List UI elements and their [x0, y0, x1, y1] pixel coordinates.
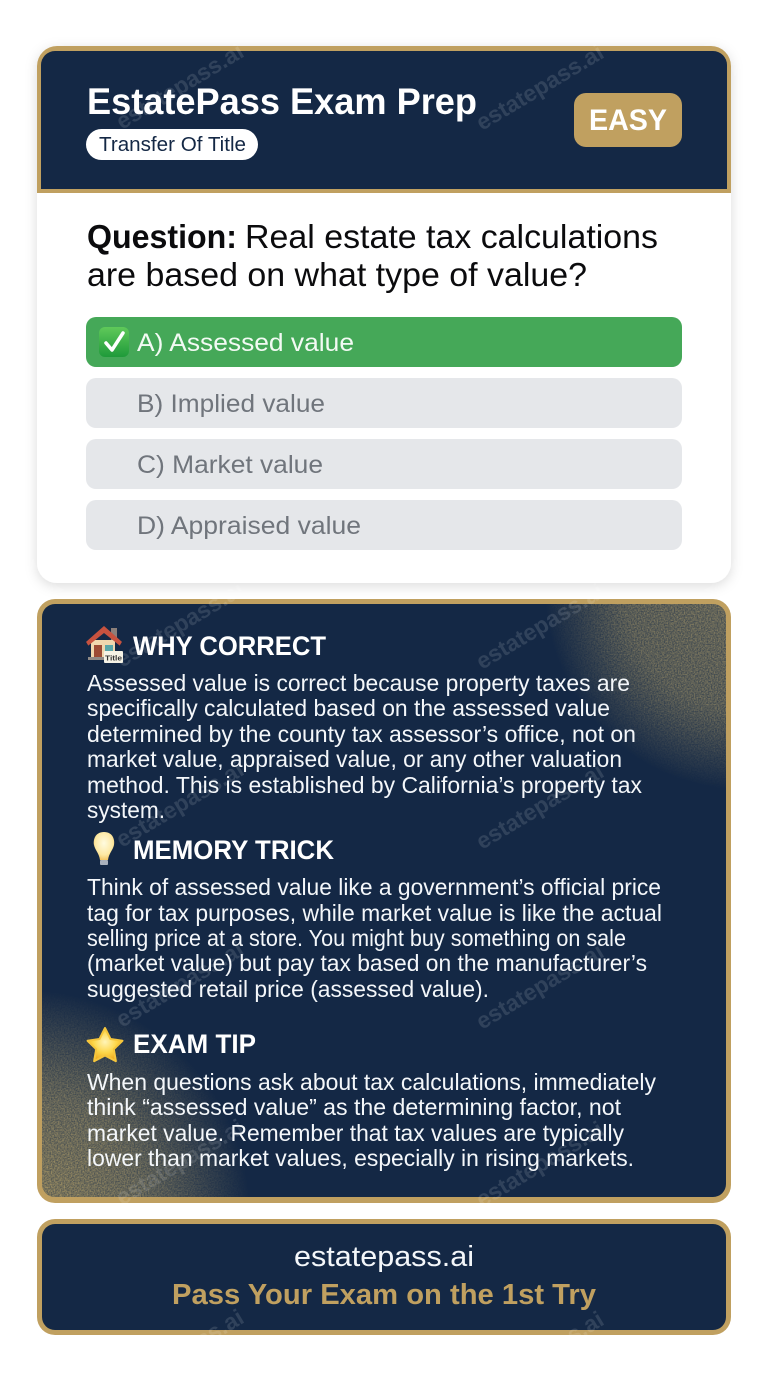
why correct body: determined by the county tax assessor’s office, not on — [87, 721, 636, 747]
option B: B) Implied value — [137, 390, 325, 418]
watermarks: estatepass.ai — [111, 1114, 248, 1210]
panel: footer — [37, 1219, 731, 1335]
icon: house with title: Title — [105, 656, 122, 662]
watermarks — [111, 38, 608, 1376]
title: EstatePass Exam Prep — [87, 81, 477, 122]
section: why correct: WHY CORRECT — [133, 631, 326, 661]
memory trick body: (market value) but pay tax based on the manufacturer’s — [87, 950, 647, 976]
category pill — [86, 129, 258, 160]
footer url: estatepass.ai — [294, 1241, 474, 1273]
watermarks: estatepass.ai — [111, 936, 248, 1032]
watermarks: estatepass.ai — [471, 938, 608, 1034]
question text: Question: — [87, 218, 237, 255]
footer tagline: Pass Your Exam on the 1st Try — [172, 1279, 596, 1311]
exam tip body: think “assessed value” as the determining factor, not — [87, 1094, 622, 1120]
option D: D) Appraised value — [137, 512, 361, 540]
option B — [86, 378, 682, 428]
option D — [86, 500, 682, 550]
section: exam tip: EXAM TIP — [133, 1029, 256, 1059]
section: exam tip — [88, 1028, 256, 1061]
memory trick body — [87, 874, 662, 1002]
exam tip body: When questions ask about tax calculations, immediately — [87, 1069, 656, 1095]
panel: question card — [37, 46, 731, 583]
memory trick body: suggested retail price (assessed value). — [87, 976, 489, 1002]
question text: Real estate tax calculations — [245, 218, 658, 255]
difficulty badge: EASY — [589, 104, 667, 137]
memory trick body: Think of assessed value like a government’s official price — [87, 874, 661, 900]
section: why correct — [87, 627, 326, 663]
section: memory trick: MEMORY TRICK — [133, 835, 334, 865]
why correct body: specifically calculated based on the assessed value — [87, 695, 610, 721]
watermarks: estatepass.ai — [471, 758, 608, 854]
icon: star — [88, 1028, 122, 1061]
watermarks: estatepass.ai — [111, 38, 248, 134]
option C — [86, 439, 682, 489]
why correct body: Assessed value is correct because property taxes are — [87, 670, 630, 696]
watermarks: estatepass.ai — [111, 576, 248, 672]
icon: light bulb — [94, 832, 114, 865]
watermarks: estatepass.ai — [471, 39, 608, 135]
category pill: Transfer Of Title — [99, 134, 246, 156]
option C: C) Market value — [137, 451, 323, 479]
question text: are based on what type of value? — [87, 256, 587, 293]
watermarks: estatepass.ai — [471, 578, 608, 674]
question text — [87, 218, 658, 293]
why correct body: system. — [87, 797, 165, 823]
header band — [37, 46, 731, 193]
memory trick body: tag for tax purposes, while market value is like the actual — [87, 900, 662, 926]
why correct body — [87, 670, 642, 823]
icon: house with title — [87, 627, 123, 663]
option A correct: A) Assessed value — [137, 329, 354, 357]
watermarks: estatepass.ai — [111, 756, 248, 852]
option A correct — [86, 317, 682, 367]
why correct body: market value, appraised value, or any other valuation — [87, 746, 622, 772]
panel: explanations — [37, 599, 731, 1203]
exam tip body: lower than market values, especially in rising markets. — [87, 1145, 634, 1171]
exam tip body — [87, 1069, 656, 1171]
exam tip body: market value. Remember that tax values are typically — [87, 1120, 624, 1146]
why correct body: method. This is established by California’s property tax — [87, 772, 642, 798]
difficulty badge — [574, 93, 682, 147]
watermarks: estatepass.ai — [471, 1116, 608, 1212]
icon: check mark — [99, 327, 129, 357]
memory trick body: selling price at a store. You might buy something on sale — [87, 925, 626, 951]
